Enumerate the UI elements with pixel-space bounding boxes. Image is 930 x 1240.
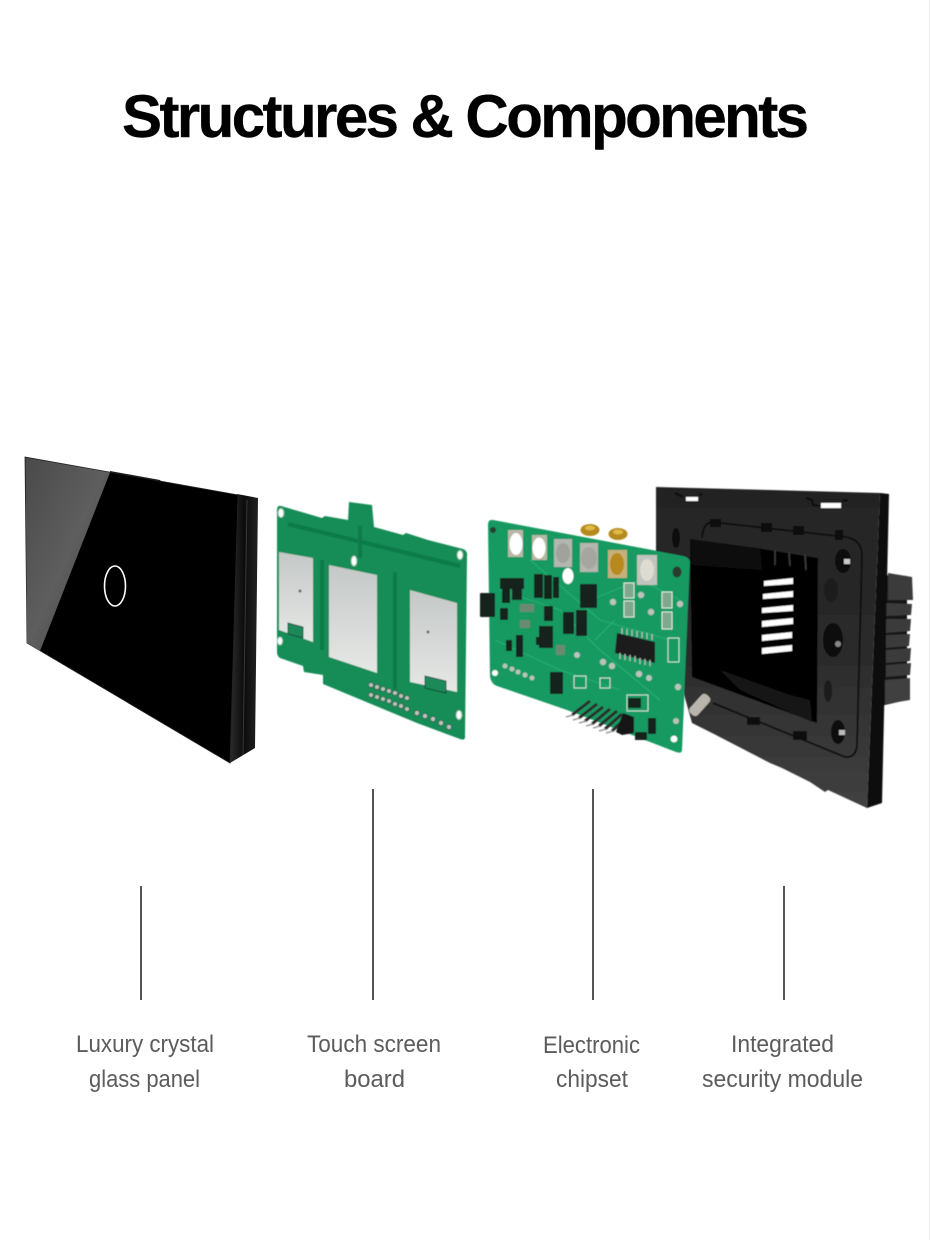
title: Structures & Components [122, 83, 809, 150]
callout line: glass panel [140, 886, 142, 1000]
resistor lead [687, 692, 712, 718]
touch ring [104, 566, 126, 606]
PCB light traces [495, 560, 680, 700]
label: touch screen board [307, 1031, 441, 1093]
lower SMD components [628, 698, 656, 740]
panel top clips [110, 471, 162, 483]
main IC chip [615, 633, 655, 663]
terminal pads [508, 530, 657, 585]
panel side edge [230, 494, 258, 763]
wall clips [710, 519, 843, 740]
brass terminals [580, 524, 628, 540]
white contact slots [762, 578, 793, 654]
black SMD components [480, 574, 597, 694]
callout line: security module [783, 886, 785, 1000]
connector solder points [369, 683, 452, 730]
small pad components [288, 623, 446, 693]
center hole [562, 568, 574, 584]
screw bosses [672, 528, 851, 744]
contact tabs [775, 550, 806, 570]
top clip slots [686, 497, 841, 508]
small silk components [520, 604, 565, 655]
callout line: electronic chipset [592, 789, 594, 1000]
board mounting holes [278, 508, 463, 720]
label: electronic chipset: chipset [556, 1066, 628, 1093]
plate inner wall line [702, 522, 862, 757]
solder dots [502, 592, 683, 724]
label: integrated security module: security module [702, 1066, 863, 1093]
label: electronic chipset: Electronic [543, 1032, 640, 1059]
white silkscreen boxes [624, 583, 672, 629]
green PCB [488, 520, 690, 753]
component: crystal glass panel [25, 457, 258, 763]
board traces [288, 524, 460, 690]
component: electronic chipset [480, 520, 712, 753]
label: luxury crystal glass panel: Luxury crystal [76, 1031, 214, 1058]
label: integrated security module [702, 1031, 863, 1093]
label: electronic chipset [543, 1032, 640, 1093]
label: touch screen board: board [344, 1066, 405, 1093]
label: touch screen board: Touch screen [307, 1031, 441, 1058]
plate window [690, 539, 818, 723]
IC pins [620, 628, 652, 666]
plate edge [867, 493, 889, 808]
component: touch screen board [277, 502, 467, 740]
white mount holes [492, 670, 677, 742]
callout line: touch screen board [372, 789, 374, 1000]
left silver pad [279, 552, 313, 642]
terminal block [880, 573, 913, 706]
corner holes [490, 527, 682, 578]
component: security module back plate [656, 487, 913, 808]
pin header [566, 701, 634, 735]
panel glass face [25, 457, 238, 763]
label: integrated security module: Integrated [731, 1031, 834, 1058]
label: luxury crystal glass panel [76, 1031, 214, 1093]
label: luxury crystal glass panel: glass panel [89, 1066, 200, 1093]
right silver pad [410, 590, 457, 692]
panel glare [26, 458, 110, 651]
silk outlines [574, 638, 679, 711]
plate body [656, 487, 880, 808]
middle silver pad [329, 565, 377, 673]
green board outline [277, 502, 467, 740]
